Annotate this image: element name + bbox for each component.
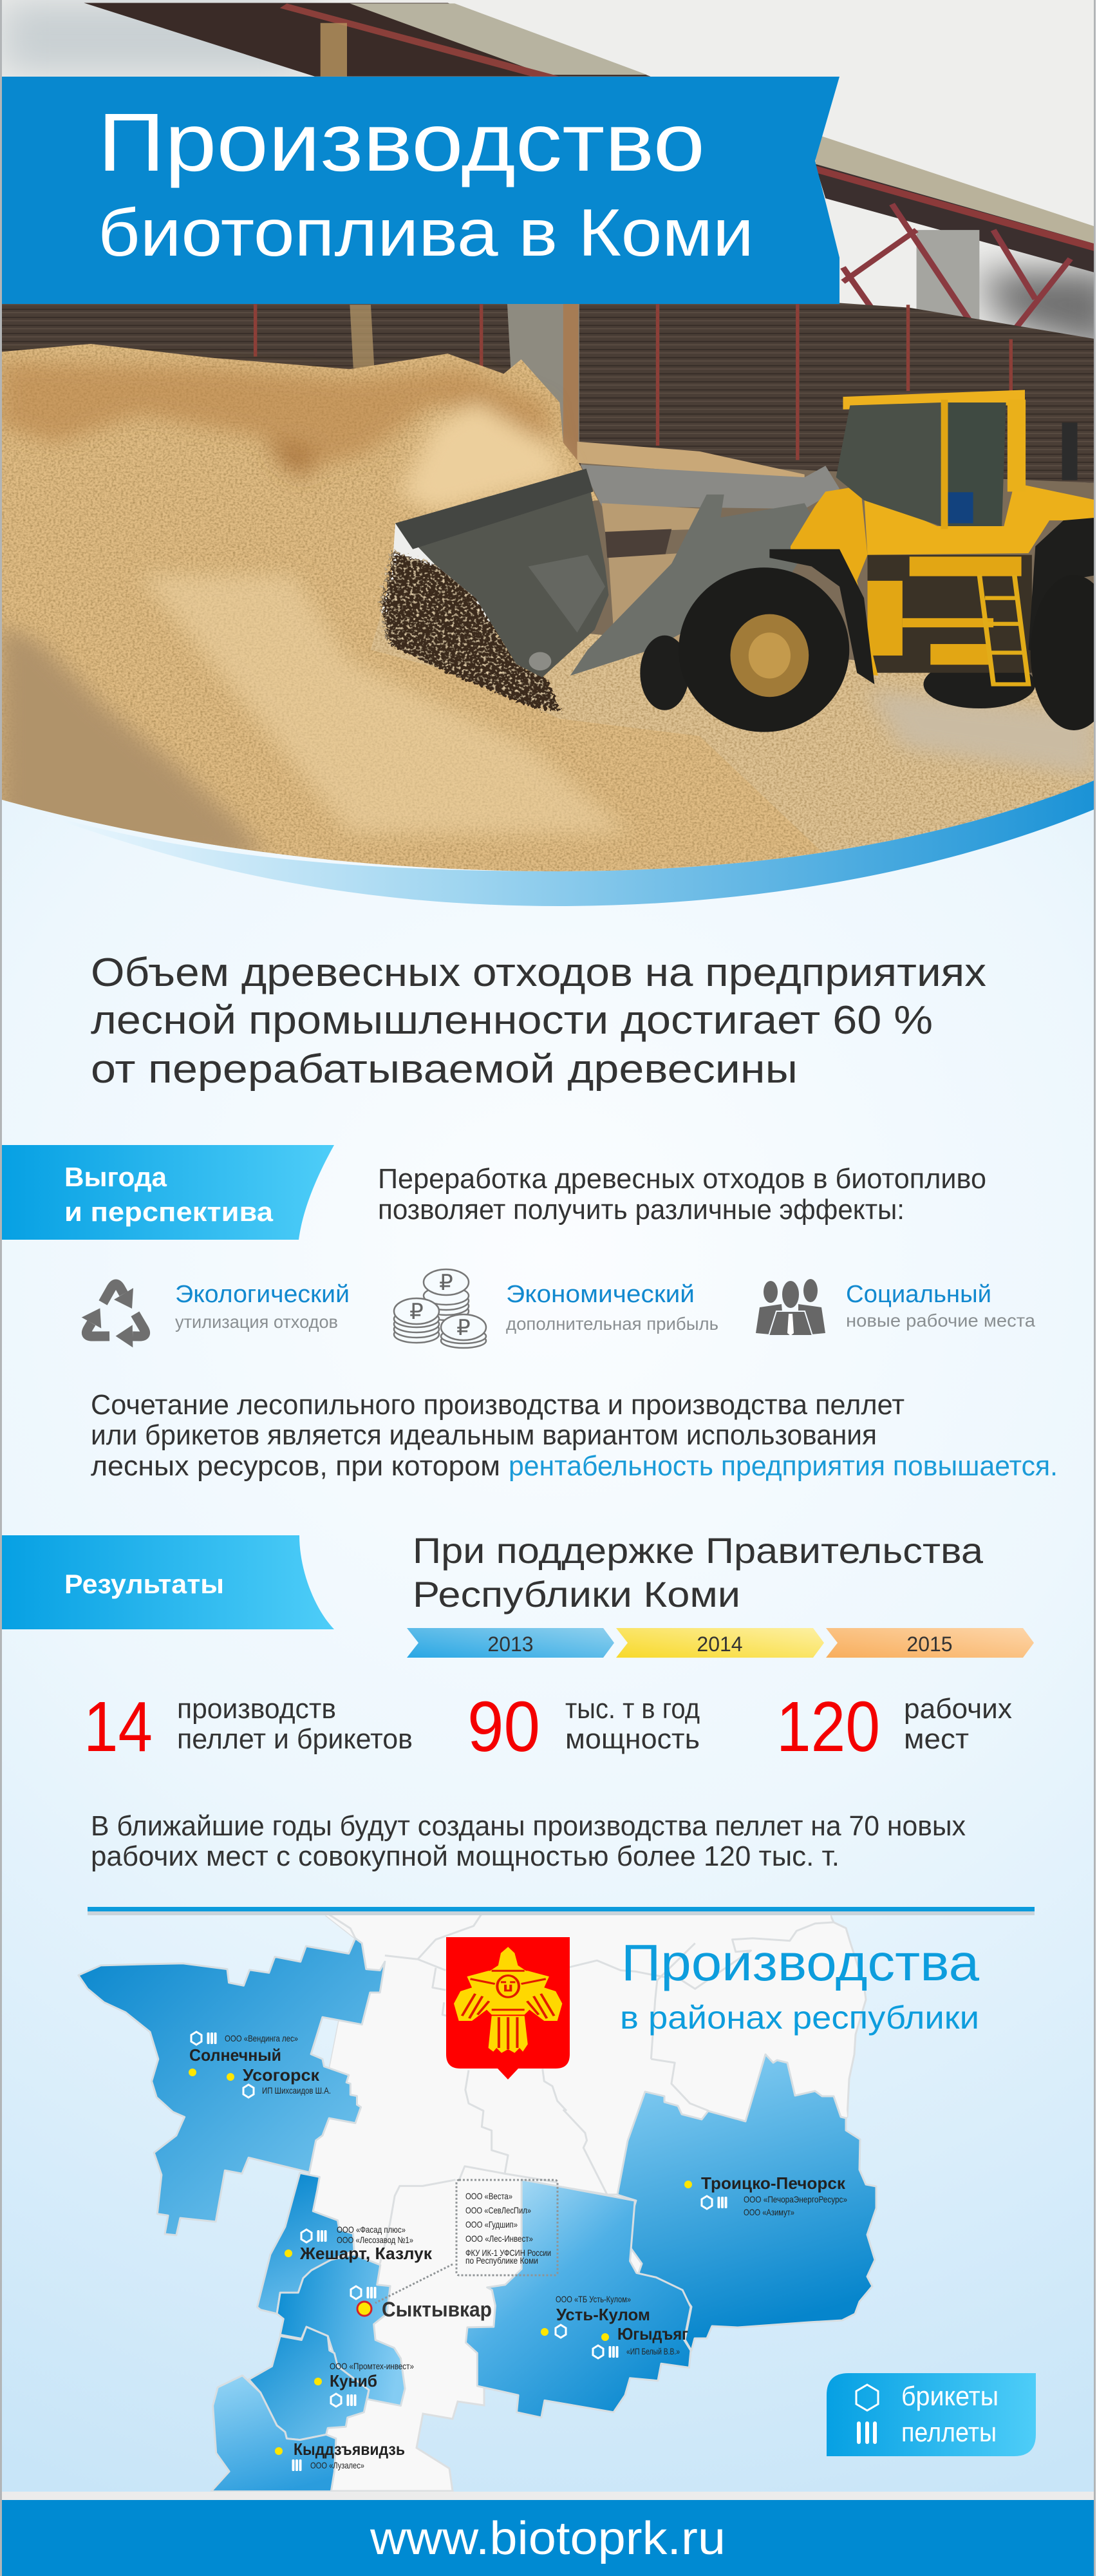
icon: coin stacks [394, 1269, 486, 1348]
paragraph: profitability [91, 1389, 1058, 1482]
map label: Troitsko-Pechorsk [684, 2174, 847, 2217]
paragraph: future plans: рабочих мест с совокупной мощностью более 120 тыс. т. [91, 1841, 839, 1872]
label: economic effect: Экономический [506, 1281, 695, 1308]
label: ecological effect [175, 1281, 350, 1332]
callout: Syktyvkar companies: ООО «Лес-Инвест» [465, 2233, 533, 2244]
callout: Syktyvkar companies: ООО «Гудшип» [465, 2219, 518, 2230]
stat: 90 thousand tonnes: тыс. т в год [565, 1693, 700, 1725]
map label: Troitsko-Pechorsk: ООО «ПечораЭнергоРесурс» [744, 2194, 847, 2204]
callout: Syktyvkar companies: ФКУ ИК-1 УФСИН России [465, 2248, 551, 2258]
map label: Ust-Kulom: Усть-Кулом [556, 2305, 650, 2324]
map label: Zheshart, Kazluk: ООО «Фасад плюс» [337, 2224, 406, 2235]
map label: Ust-Kulom [541, 2294, 650, 2338]
heading: productions in districts [620, 1934, 980, 2036]
stat: 120 jobs: рабочих [904, 1693, 1012, 1725]
map label: Yugydyag: Югыдъяг [617, 2324, 688, 2344]
intro statement [91, 951, 986, 1092]
map label: Kunib: ООО «Промтех-инвест» [330, 2361, 414, 2371]
paragraph: profitability: рентабельность предприятия повышается. [509, 1450, 1058, 1482]
timeline arrows [407, 1628, 1034, 1658]
map label: Usogorsk [227, 2065, 331, 2098]
map label: Zheshart, Kazluk: ООО «Лесозавод №1» [337, 2235, 413, 2245]
hero photo: wood chips and loader [0, 0, 1097, 902]
paragraph: future plans: В ближайшие годы будут созданы производства пеллет на 70 новых [91, 1810, 966, 1842]
label: social effect [846, 1281, 1035, 1331]
map label: Syktyvkar: Сыктывкар [382, 2298, 492, 2321]
map label: Ust-Kulom: ООО «ТБ Усть-Кулом» [556, 2294, 631, 2304]
benefits intro text: Переработка древесных отходов в биотопливо [378, 1163, 986, 1195]
legend: briquettes and pellets: пеллеты [901, 2417, 997, 2447]
map label: Solnechny: ООО «Вендинга лес» [225, 2033, 298, 2043]
district: Troitsko-Pechorsk [617, 2054, 876, 2351]
intro statement: от перерабатываемой древесины [91, 1047, 798, 1092]
map: Komi Republic districts [79, 1913, 876, 2492]
intro statement: Объем древесных отходов на предприятиях [91, 951, 986, 995]
map label: Solnechny [189, 2032, 298, 2076]
icon: coin stacks: ₽ [439, 1271, 453, 1295]
district: Syktyvkar [277, 2255, 405, 2406]
paragraph: future plans [91, 1810, 966, 1872]
map label: Kunib [314, 2361, 414, 2407]
map label: Kyddzyavidz [275, 2439, 405, 2471]
map label: Solnechny: Солнечный [189, 2045, 281, 2065]
section tag: benefits [0, 1145, 334, 1240]
stat: 90 thousand tonnes: 90 [467, 1687, 540, 1766]
stat: 14 production sites: производств [177, 1693, 336, 1725]
map label: Kyddzyavidz: ООО «Лузалес» [310, 2460, 364, 2470]
callout: Syktyvkar companies: по Республике Коми [465, 2255, 538, 2266]
title banner: Производство [98, 97, 705, 189]
intro statement: лесной промышленности достигает 60 % [91, 998, 933, 1043]
district: Ust-Kulom [465, 2179, 691, 2418]
government support heading: При поддержке Правительства [413, 1530, 984, 1571]
callout: Syktyvkar companies [375, 2180, 558, 2303]
icon: coin stacks: ₽ [456, 1316, 471, 1340]
government support heading [413, 1530, 984, 1615]
coat of arms of Komi [446, 1937, 570, 2079]
benefits intro text: позволяет получить различные эффекты: [378, 1194, 905, 1226]
district: Kyddzyavidz [211, 2376, 336, 2492]
map label: Usogorsk: Усогорск [243, 2065, 320, 2085]
map label: Yugydyag: «ИП Белый В.В.» [626, 2346, 680, 2356]
paragraph: profitability: лесных ресурсов, при котором [91, 1450, 500, 1482]
label: economic effect: дополнительная прибыль [506, 1314, 718, 1334]
map label: Troitsko-Pechorsk: ООО «Азимут» [744, 2207, 794, 2217]
stat: 120 jobs: 120 [776, 1687, 880, 1766]
map label: Syktyvkar [351, 2286, 492, 2321]
section tag: benefits: и перспектива [64, 1197, 274, 1227]
heading: productions in districts: в районах республики [620, 2000, 979, 2036]
map label: Usogorsk: ИП Шихсаидов Ш.А. [262, 2085, 331, 2096]
label: social effect: новые рабочие места [846, 1311, 1035, 1331]
callout: Syktyvkar companies: ООО «Веста» [465, 2191, 512, 2201]
stat: 120 jobs [776, 1687, 1012, 1766]
stat: 14 production sites: пеллет и брикетов [177, 1723, 413, 1755]
map label: Zheshart, Kazluk: Жешарт, Казлук [299, 2244, 433, 2263]
title banner: биотоплива в Коми [98, 196, 754, 270]
stat: 14 production sites [84, 1687, 413, 1766]
paragraph: profitability: или брикетов является идеальным вариантом использования [91, 1419, 877, 1451]
timeline arrows: 2013 [487, 1633, 534, 1656]
label: economic effect [506, 1281, 718, 1334]
section tag: results: Результаты [64, 1569, 224, 1599]
section tag: benefits: Выгода [64, 1162, 167, 1192]
map label: Yugydyag [593, 2324, 688, 2358]
legend: briquettes and pellets: брикеты [901, 2381, 999, 2411]
heading: productions in districts: Производства [621, 1934, 980, 1991]
government support heading: Республики Коми [413, 1574, 740, 1615]
district: Solnechny / Usogorsk [79, 1938, 385, 2235]
decorative blue wave under photo [39, 779, 1097, 906]
callout: Syktyvkar companies: ООО «СевЛесПил» [465, 2205, 531, 2215]
district: Zheshart / Kazluk [257, 2173, 354, 2314]
paragraph: profitability: Сочетание лесопильного производства и производства пеллет [91, 1389, 905, 1421]
timeline arrows: 2014 [697, 1633, 743, 1656]
icon: group of people [756, 1279, 825, 1336]
stat: 120 jobs: мест [904, 1723, 969, 1755]
label: social effect: Социальный [846, 1281, 991, 1308]
map label: Troitsko-Pechorsk: Троицко-Печорск [701, 2174, 846, 2193]
label: ecological effect: Экологический [175, 1281, 350, 1308]
timeline arrows: 2015 [906, 1633, 953, 1656]
legend: briquettes and pellets [827, 2373, 1036, 2456]
icon: recycling arrows [78, 1284, 151, 1349]
footer with website: www.biotoprk.ru [370, 2513, 726, 2564]
icon: coin stacks: ₽ [409, 1300, 424, 1324]
stat: 90 thousand tonnes [467, 1687, 700, 1766]
title banner [0, 77, 839, 304]
map label: Kunib: Куниб [330, 2371, 377, 2391]
benefits intro text [378, 1163, 986, 1226]
footer with website [0, 2492, 1097, 2576]
map label: Kyddzyavidz: Кыддзъявидзь [294, 2439, 405, 2459]
horizontal rule [88, 1907, 1035, 1915]
stat: 14 production sites: 14 [84, 1687, 153, 1766]
label: ecological effect: утилизация отходов [175, 1312, 338, 1332]
district: Kunib [249, 2327, 369, 2440]
map label: Zheshart, Kazluk [285, 2224, 433, 2263]
stat: 90 thousand tonnes: мощность [565, 1723, 700, 1755]
section tag: results [0, 1535, 334, 1629]
